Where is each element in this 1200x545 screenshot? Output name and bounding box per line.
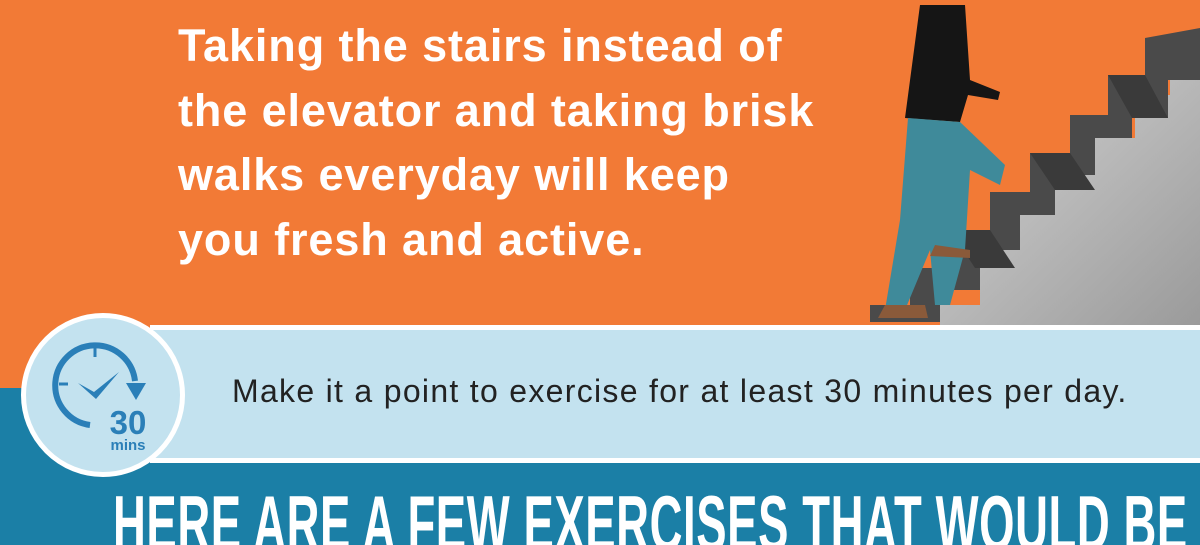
dark blue bottom panel (0, 388, 1200, 545)
main text block: you fresh and active. (178, 214, 645, 264)
icon: 30 minutes clock: mins (110, 437, 146, 454)
main text block: Taking the stairs instead of (178, 20, 782, 71)
light blue band (150, 330, 1200, 458)
icon: 30 minutes clock (21, 313, 185, 477)
icon: 30 minutes clock: 30 (110, 404, 146, 441)
orange top panel (0, 0, 1200, 388)
person (878, 5, 1005, 318)
main text block (178, 20, 814, 264)
stairs illustration (870, 5, 1200, 325)
main text block: the elevator and taking brisk (178, 84, 814, 136)
white line borders (150, 325, 1200, 463)
tip text: Make it a point to exercise for at least 30 minutes per day. (232, 373, 1128, 409)
main text block: walks everyday will keep (178, 149, 730, 200)
